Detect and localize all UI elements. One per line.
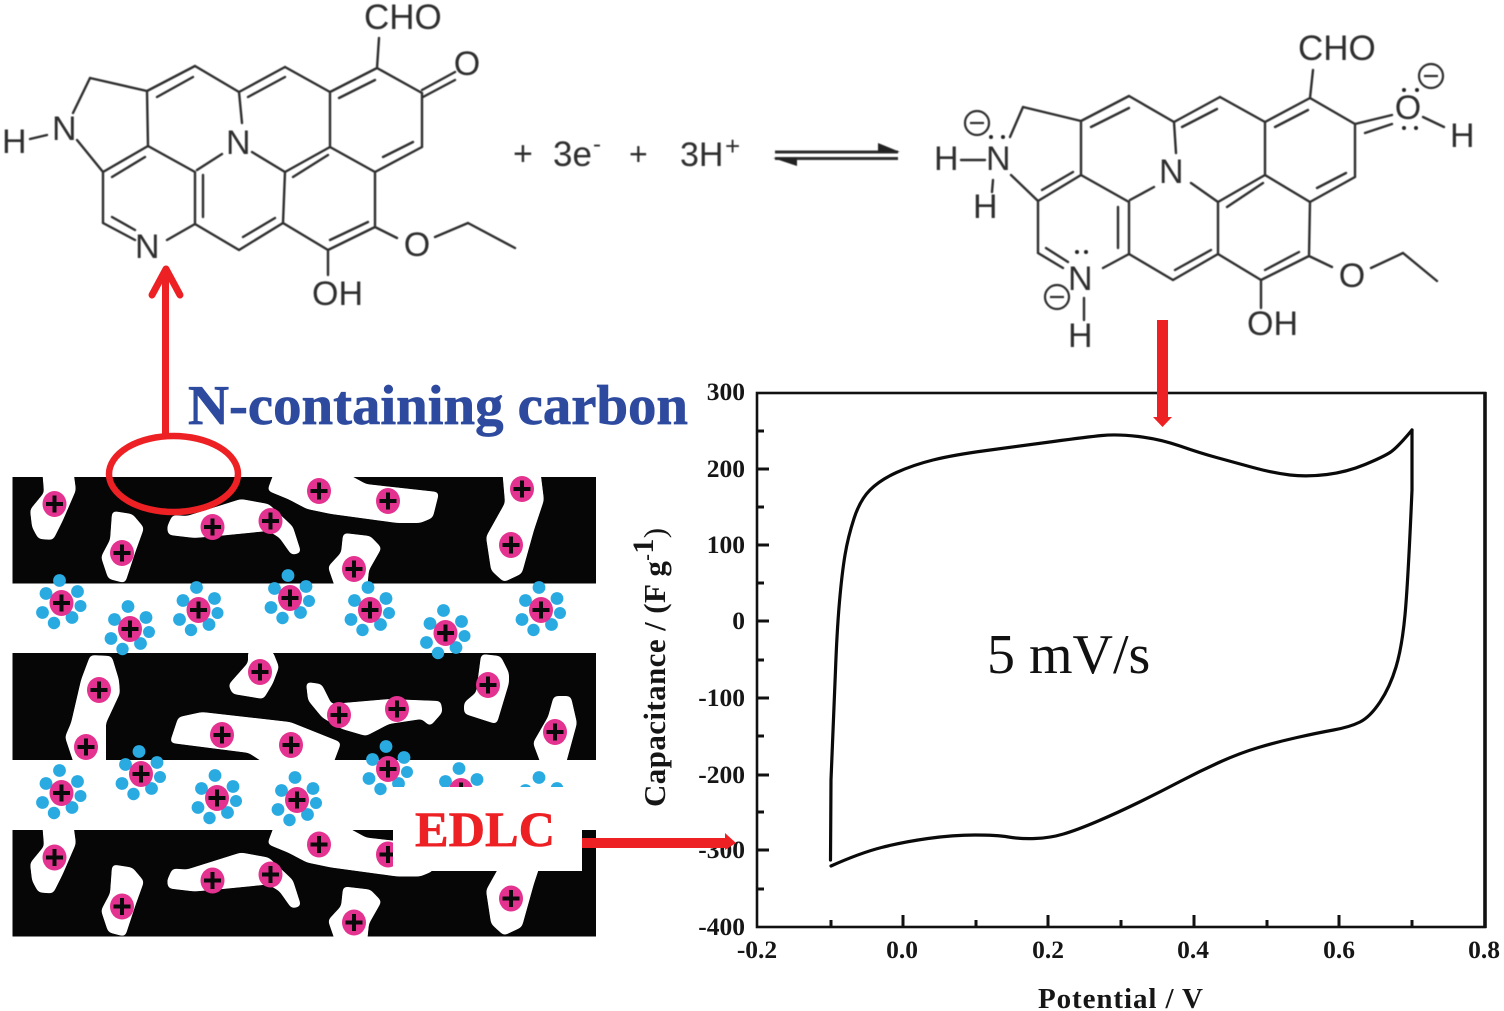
y axis numbers: -400	[698, 912, 745, 941]
y axis numbers: 300	[707, 377, 745, 406]
atom labels: CHO	[1298, 29, 1376, 68]
atom labels: N	[226, 124, 251, 162]
carbon layer top	[12, 468, 596, 590]
y axis numbers: 0	[732, 606, 745, 635]
callout: EDLC label box: EDLC	[415, 801, 555, 857]
reaction text: plus electrons and protons: -	[593, 131, 601, 158]
y axis title: 1	[627, 538, 660, 554]
reaction text: plus electrons and protons: +	[513, 135, 533, 173]
y axis numbers: -200	[698, 760, 745, 789]
y axis title: -	[636, 554, 658, 561]
arrow: EDLC to chart	[582, 833, 736, 850]
arrow: reversible reaction	[773, 143, 900, 166]
lone pair dots	[989, 88, 1419, 254]
atom labels: N	[1068, 260, 1093, 298]
negative charge markers	[965, 64, 1443, 309]
atom labels: H	[973, 188, 998, 226]
atom labels	[2, 0, 480, 313]
reaction text: plus electrons and protons: +	[725, 131, 740, 161]
heading: N-containing carbon: N-containing carbon	[188, 375, 688, 437]
reaction text: plus electrons and protons	[513, 131, 740, 174]
axes frame	[757, 393, 1485, 927]
x axis numbers: 0.8	[1468, 935, 1500, 964]
carbon layer middle	[12, 651, 596, 767]
y axis numbers: 200	[707, 454, 745, 483]
atom labels: H	[2, 123, 27, 161]
scan rate annotation: 5 mV/s	[987, 624, 1150, 686]
x axis numbers: 0.2	[1032, 935, 1064, 964]
molecule: oxidised form	[2, 0, 515, 313]
carbon layer bottom	[12, 822, 596, 944]
arrow: circle up to N site	[152, 269, 180, 434]
x axis numbers	[737, 935, 1500, 964]
atom labels: OH	[1247, 305, 1298, 343]
atom labels: H	[1068, 317, 1093, 355]
atom labels: O	[454, 45, 480, 83]
atom labels: OH	[312, 275, 363, 313]
x axis numbers: 0.4	[1177, 935, 1209, 964]
x axis numbers: 0.0	[886, 935, 918, 964]
reaction text: plus electrons and protons: +	[629, 136, 648, 172]
solvated ions lower gap	[36, 740, 566, 826]
atom labels: O	[1395, 89, 1421, 127]
callout: EDLC label box	[393, 787, 582, 871]
atom labels: O	[404, 226, 430, 264]
y axis numbers: 100	[707, 530, 745, 559]
atom labels	[934, 29, 1475, 355]
chart: cyclic voltammogram	[627, 377, 1500, 1011]
x axis numbers: -0.2	[737, 935, 777, 964]
reaction text: plus electrons and protons: 3H	[680, 136, 723, 174]
y axis numbers	[698, 377, 745, 941]
molecule: reduced form	[934, 29, 1475, 355]
atom labels: O	[1339, 257, 1365, 295]
atom labels: N	[135, 228, 160, 266]
atom labels: N	[52, 110, 77, 148]
atom labels: H	[1450, 117, 1475, 155]
y axis title: Capacitance / (F g	[637, 561, 672, 807]
y axis numbers: -300	[698, 835, 745, 864]
axis ticks	[757, 431, 1412, 927]
panel: carbon layers with electrolyte ions	[12, 468, 596, 944]
x axis numbers: 0.6	[1323, 935, 1355, 964]
atom labels: N	[986, 140, 1011, 178]
atom labels: H	[934, 140, 959, 178]
CV curve	[830, 430, 1412, 866]
solvated ions upper gap	[36, 569, 566, 659]
arrow: molecule down to chart	[1153, 320, 1172, 427]
reaction text: plus electrons and protons: 3e	[553, 135, 592, 174]
y axis title: )	[637, 528, 672, 538]
atom labels: N	[1159, 153, 1184, 191]
y axis numbers: -100	[698, 683, 745, 712]
red circle highlighting carbon surface	[109, 436, 238, 512]
